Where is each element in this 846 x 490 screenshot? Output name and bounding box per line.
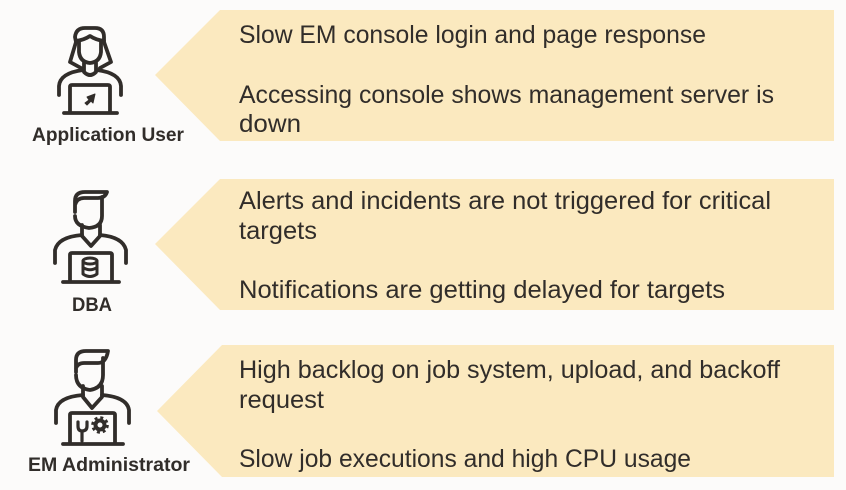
label: DBA: DBA	[72, 294, 112, 316]
text: alerts symptom: targets	[239, 217, 317, 245]
text: management server symptom: Accessing console shows management server is	[239, 81, 774, 109]
text: console login symptom: Slow EM console login and page response	[239, 21, 706, 49]
text: alerts symptom	[239, 187, 771, 245]
panel: DBA	[155, 179, 834, 310]
panel: application user	[155, 10, 834, 141]
text: backlog symptom: High backlog on job system, upload, and backoff	[239, 356, 780, 384]
panel: EM administrator	[157, 345, 834, 477]
text: notifications symptom: Notifications are getting delayed for targets	[239, 276, 725, 304]
icon: EM administrator	[56, 351, 129, 444]
text: job execution symptom: Slow job executions and high CPU usage	[239, 445, 691, 473]
text: backlog symptom: request	[239, 386, 324, 414]
text: management server symptom	[239, 81, 774, 138]
text: backlog symptom	[239, 356, 780, 414]
label: application user: Application User	[32, 124, 184, 146]
text: management server symptom: down	[239, 110, 301, 138]
label: EM administrator: EM Administrator	[28, 454, 190, 476]
text: alerts symptom: Alerts and incidents are not triggered for critical	[239, 187, 771, 215]
icon: application user	[59, 28, 121, 113]
icon: DBA	[55, 192, 126, 282]
